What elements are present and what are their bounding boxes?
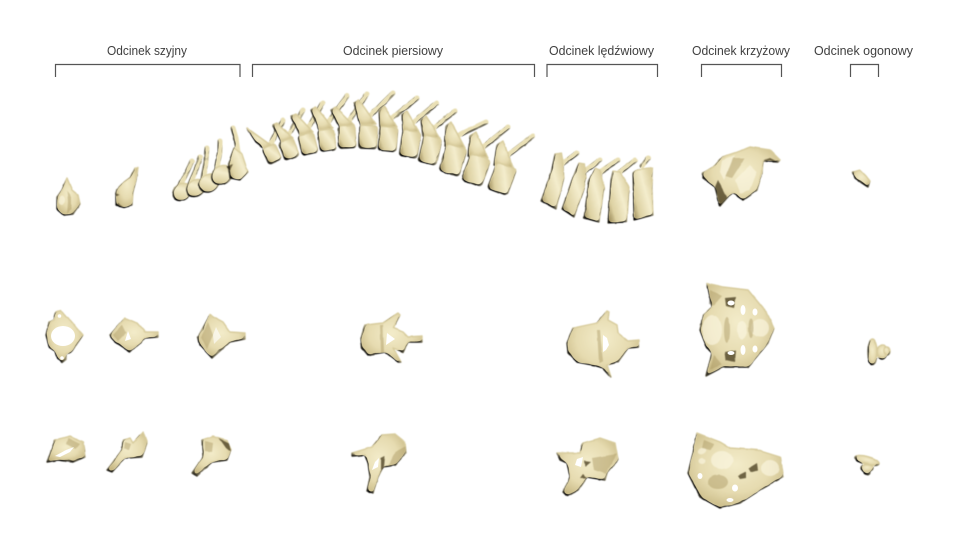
- bracket: thoracic: [252, 64, 534, 77]
- cervical top view: first vertebra: [46, 310, 83, 363]
- sacrum oblique view: [688, 433, 783, 508]
- heading: Odcinek krzyżowy: Odcinek krzyżowy: [692, 44, 791, 58]
- thoracic vertebra 12: [487, 136, 533, 196]
- section: sacral heading and bracket: [692, 44, 791, 77]
- lumbar side view: five vertebrae: [541, 153, 653, 223]
- lumbar vertebra 4: [608, 160, 635, 223]
- heading: Odcinek szyjny: Odcinek szyjny: [107, 44, 188, 58]
- heading: Odcinek ogonowy: Odcinek ogonowy: [814, 44, 914, 58]
- bracket: coccygeal: [850, 64, 878, 77]
- cervical side view: first vertebra: [57, 178, 80, 215]
- lumbar vertebra 3: [584, 160, 618, 222]
- lumbar top view: [567, 311, 639, 377]
- section: coccygeal heading and bracket: [814, 44, 914, 77]
- cervical vertebra 5: [196, 148, 222, 196]
- cervical vertebra 3: [169, 161, 195, 204]
- heading: Odcinek piersiowy: Odcinek piersiowy: [343, 44, 444, 58]
- cervical vertebra 6: [208, 141, 236, 189]
- lumbar vertebra 2: [562, 160, 600, 217]
- cervical vertebra 7: [226, 128, 248, 180]
- lumbar vertebra 1: [541, 153, 577, 209]
- thoracic side view: twelve vertebrae: [247, 93, 533, 196]
- thoracic vertebra 8: [399, 103, 437, 158]
- cervical oblique view: first vertebra: [47, 436, 85, 462]
- cervical oblique view: second vertebra: [107, 432, 147, 472]
- thoracic vertebra 4: [311, 96, 347, 152]
- coccyx top view: [868, 340, 890, 364]
- thoracic vertebra 5: [331, 94, 367, 148]
- thoracic vertebra 10: [439, 122, 486, 176]
- coccyx oblique view: [854, 453, 880, 474]
- bracket: sacral: [702, 64, 782, 77]
- cervical vertebra 4: [183, 157, 209, 200]
- thoracic oblique view: [352, 434, 406, 493]
- lumbar vertebra 5: [633, 158, 653, 220]
- thoracic vertebra 11: [461, 127, 508, 187]
- thoracic vertebra 9: [418, 111, 455, 165]
- cervical oblique view: third vertebra: [192, 436, 231, 476]
- cervical side view: vertebrae group: [169, 128, 248, 204]
- cervical top view: third vertebra: [198, 315, 245, 358]
- thoracic top view: [361, 313, 422, 362]
- bracket: cervical: [56, 64, 240, 77]
- thoracic vertebra 7: [378, 98, 417, 152]
- heading: Odcinek lędźwiowy: Odcinek lędźwiowy: [549, 44, 655, 58]
- sacrum side view: [703, 147, 780, 206]
- bracket: lumbar: [547, 64, 658, 77]
- thoracic vertebra 2: [273, 110, 303, 160]
- thoracic vertebra 6: [354, 93, 393, 149]
- section: lumbar heading and bracket: [547, 44, 658, 77]
- section: cervical heading and bracket: [56, 44, 240, 77]
- cervical side view: second vertebra: [115, 167, 138, 207]
- thoracic vertebra 3: [291, 103, 323, 156]
- sacrum top view: [700, 283, 774, 376]
- thoracic vertebra 1: [247, 120, 283, 165]
- coccyx side view: [853, 170, 870, 187]
- section: thoracic heading and bracket: [252, 44, 534, 77]
- lumbar oblique view: [557, 438, 618, 496]
- cervical top view: second vertebra: [110, 318, 158, 352]
